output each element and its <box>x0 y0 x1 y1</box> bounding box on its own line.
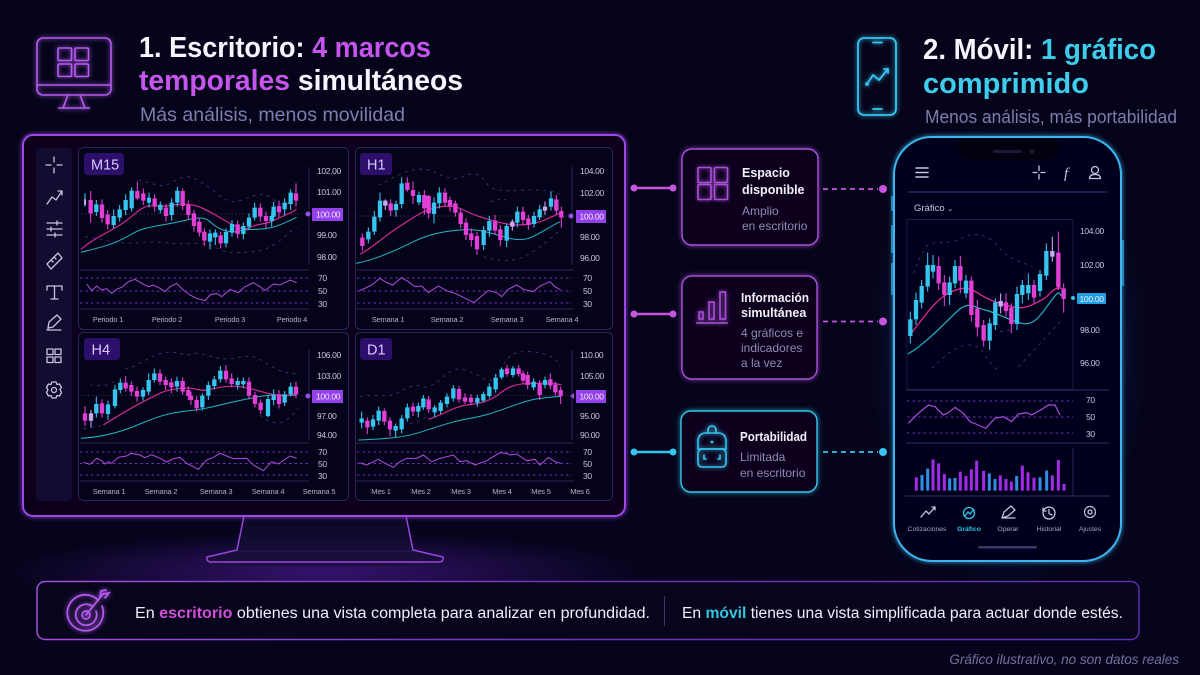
title: mobile: 2. Móvil: 1 gráfico <box>923 34 1156 66</box>
monitor stand <box>207 516 443 566</box>
connector: informacion right <box>823 318 887 326</box>
time axis H1 <box>372 315 578 324</box>
icon: trend <box>47 191 62 204</box>
price axis mobile <box>1071 226 1106 439</box>
title: desktop: 1. Escritorio: 4 marcos <box>139 32 431 64</box>
title: mobile: comprimido <box>923 68 1089 100</box>
icon: crosshair <box>46 157 62 173</box>
price axis D1: 100.00 <box>580 392 604 402</box>
icon: function: f <box>1064 166 1070 182</box>
footnote: Gráfico ilustrativo, no son datos reales <box>949 652 1179 667</box>
time axis H4: Semana 2 <box>145 487 177 496</box>
chart panel: H4 <box>78 332 348 500</box>
tab: operar <box>997 506 1019 533</box>
notch <box>958 139 1058 160</box>
card: informacion simultanea <box>682 276 817 379</box>
price axis H1: 102.00 <box>580 188 605 198</box>
price axis D1: 110.00 <box>580 350 604 360</box>
icon: grid <box>47 349 61 362</box>
card text <box>742 166 808 233</box>
RSI line mobile <box>908 405 1060 428</box>
timeframe tag D1 <box>360 338 392 360</box>
timeframe tag H1 <box>360 153 392 175</box>
icon: grid <box>698 168 728 200</box>
price axis D1: 95.00 <box>580 411 600 421</box>
price axis M15: 100.00 <box>316 210 341 220</box>
time axis M15: Periodo 2 <box>152 315 182 324</box>
price axis H4: 30 <box>318 471 327 481</box>
tab: grafico <box>957 508 981 533</box>
label: grafico dropdown: Gráfico ⌄ <box>914 203 953 214</box>
chart panel: M15 <box>78 148 348 330</box>
card text: indicadores <box>741 341 802 355</box>
time axis M15: Periodo 1 <box>93 315 123 324</box>
icon: text tool <box>47 286 62 299</box>
timeframe tag M15: M15 <box>91 158 119 174</box>
time axis D1: Mes 6 <box>570 487 590 496</box>
icon: crosshair <box>1033 166 1045 179</box>
timeframe tag M15 <box>84 153 124 175</box>
card text: a la vez <box>741 356 782 370</box>
time axis D1: Mes 5 <box>531 487 551 496</box>
price axis H1: 98.00 <box>580 232 600 242</box>
time axis H4: Semana 3 <box>200 487 232 496</box>
panel: smartphone <box>892 137 1123 561</box>
candlestick chart H1 <box>356 169 572 263</box>
title: desktop: temporales simultáneos <box>139 65 463 97</box>
time axis H4 <box>93 487 335 496</box>
text: desktop conclusion: En escritorio obtienes una vista completa para analizar en profundidad. <box>135 605 650 622</box>
panel: desktop monitor <box>23 135 625 516</box>
icon: sliders <box>47 221 62 237</box>
tab: operar: Operar <box>997 526 1019 533</box>
candlestick chart M15 <box>81 177 307 253</box>
price axis H4: 94.00 <box>317 430 337 440</box>
price axis H4: 50 <box>318 459 327 469</box>
icon: target <box>67 590 109 631</box>
price axis mobile: 70 <box>1086 395 1095 405</box>
price axis H4: 100.00 <box>316 392 341 402</box>
chart panel: D1 <box>356 332 612 500</box>
tab bar <box>908 506 1102 533</box>
card text: Amplio <box>742 204 779 218</box>
connector: portabilidad left <box>630 448 676 456</box>
card text: Información <box>741 291 809 305</box>
card text <box>740 430 807 480</box>
card: espacio disponible <box>682 149 818 245</box>
time axis H1: Semana 1 <box>372 315 404 324</box>
RSI line H1 <box>359 278 561 303</box>
price axis mobile: 98.00 <box>1080 325 1100 335</box>
price axis M15: 70 <box>318 273 327 283</box>
time axis H1: Semana 2 <box>431 315 463 324</box>
price axis D1 <box>570 350 606 481</box>
icon: backpack <box>698 426 726 467</box>
time axis D1 <box>371 487 590 496</box>
time axis D1: Mes 1 <box>371 487 391 496</box>
text: mobile conclusion: En móvil tienes una vista simplificada para actuar donde estés. <box>682 605 1123 622</box>
timeframe tag D1: D1 <box>367 342 386 358</box>
connector: portabilidad right <box>823 448 887 456</box>
price axis H1 <box>568 166 606 309</box>
connector: espacio right <box>823 185 887 193</box>
connector: espacio left <box>630 184 676 192</box>
time axis D1: Mes 3 <box>451 487 471 496</box>
price axis H1: 100.00 <box>580 212 604 222</box>
card text: Portabilidad <box>740 430 807 444</box>
icon: pen <box>47 315 61 330</box>
price axis D1: 105.00 <box>580 371 605 381</box>
tab: historial <box>1037 507 1062 533</box>
icon: ruler <box>47 253 62 269</box>
volume bars mobile <box>916 459 1064 491</box>
card text: disponible <box>742 183 805 197</box>
icon: desktop monitor <box>37 38 111 108</box>
time axis H4: Semana 5 <box>303 487 335 496</box>
card text <box>741 291 809 370</box>
price axis mobile: 100.00 <box>1080 294 1104 304</box>
price axis H4 <box>306 350 343 481</box>
tab: historial: Historial <box>1037 526 1062 533</box>
card: portabilidad <box>681 411 817 492</box>
price axis M15 <box>306 166 343 309</box>
RSI line H4 <box>83 453 297 471</box>
time axis H1: Semana 3 <box>491 315 523 324</box>
price axis H1: 50 <box>583 286 592 296</box>
mobile header <box>858 34 1177 127</box>
price axis mobile: 102.00 <box>1080 260 1105 270</box>
time axis M15 <box>93 315 307 324</box>
time axis H1: Semana 4 <box>546 315 578 324</box>
price axis mobile: 104.00 <box>1080 226 1105 236</box>
price axis H1: 30 <box>583 299 592 309</box>
icon: settings gear <box>46 382 62 398</box>
subtitle: desktop: Más análisis, menos movilidad <box>140 104 405 126</box>
tab: cotizaciones: Cotizaciones <box>908 526 947 533</box>
candlestick chart mobile <box>908 232 1064 370</box>
price axis D1: 70 <box>583 447 592 457</box>
card text: Espacio <box>742 166 790 180</box>
tab: cotizaciones <box>908 507 947 533</box>
desktop header <box>37 32 463 126</box>
chart panel: H1 <box>356 148 612 330</box>
card text: simultánea <box>741 306 807 320</box>
app header <box>916 166 1100 182</box>
price axis M15: 101.00 <box>317 187 342 197</box>
price axis M15: 102.00 <box>317 166 342 176</box>
time axis M15: Periodo 3 <box>215 315 245 324</box>
card text: en escritorio <box>740 466 806 480</box>
price axis M15: 99.00 <box>317 230 337 240</box>
time axis D1: Mes 2 <box>411 487 431 496</box>
connector: informacion left <box>630 310 676 318</box>
price axis mobile: 50 <box>1086 412 1095 422</box>
toolbar <box>36 148 72 501</box>
time axis M15: Periodo 4 <box>277 315 307 324</box>
tab: ajustes: Ajustes <box>1079 526 1102 533</box>
time axis H4: Semana 1 <box>93 487 125 496</box>
card text: Limitada <box>740 450 786 464</box>
timeframe tag H1: H1 <box>367 158 386 174</box>
price axis D1: 90.00 <box>580 430 600 440</box>
price axis H4: 106.00 <box>317 350 342 360</box>
price axis H1: 96.00 <box>580 253 600 263</box>
price axis H4: 70 <box>318 447 327 457</box>
candlestick chart D1 <box>358 352 572 440</box>
timeframe tag H4: H4 <box>92 342 110 358</box>
tab: ajustes <box>1079 506 1102 533</box>
card text: 4 gráficos e <box>741 326 803 340</box>
time axis H4: Semana 4 <box>252 487 284 496</box>
icon: user <box>1090 166 1100 178</box>
price axis D1: 50 <box>583 459 592 469</box>
title: desktop <box>139 32 463 97</box>
RSI line D1 <box>359 453 561 467</box>
icon: menu <box>916 168 928 177</box>
price axis M15: 30 <box>318 299 327 309</box>
subtitle: mobile: Menos análisis, más portabilidad <box>925 107 1177 127</box>
candlestick chart H4 <box>81 352 307 438</box>
card text: en escritorio <box>742 219 808 233</box>
price axis H4: 97.00 <box>317 411 337 421</box>
time axis D1: Mes 4 <box>492 487 512 496</box>
banner: conclusion <box>37 582 1139 640</box>
timeframe tag H4 <box>84 338 120 360</box>
RSI line M15 <box>87 279 297 301</box>
price axis H1: 70 <box>583 273 592 283</box>
price axis H1: 104.00 <box>580 166 605 176</box>
tab: grafico: Gráfico <box>957 526 981 533</box>
icon: bar chart <box>696 292 728 323</box>
price axis mobile: 30 <box>1086 429 1095 439</box>
title: mobile <box>923 34 1156 100</box>
price axis D1: 30 <box>583 471 592 481</box>
price axis mobile: 96.00 <box>1080 358 1100 368</box>
icon: smartphone <box>858 38 896 115</box>
price axis H4: 103.00 <box>317 371 342 381</box>
price axis M15: 98.00 <box>317 252 337 262</box>
price axis M15: 50 <box>318 286 327 296</box>
